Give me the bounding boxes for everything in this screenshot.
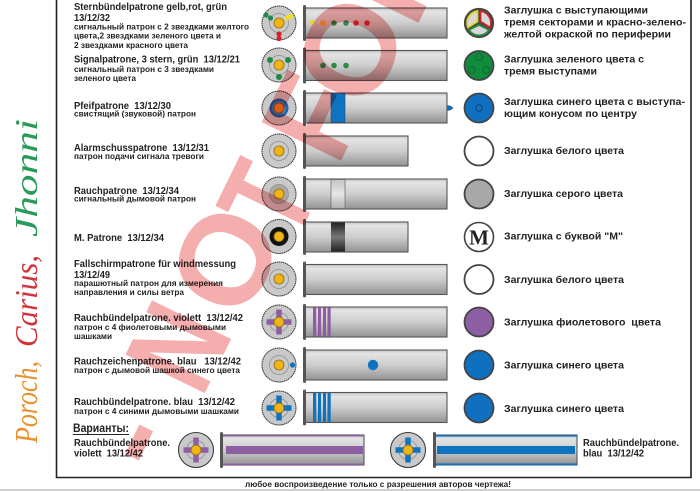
variant blue label — [583, 437, 679, 460]
row 6 end view — [262, 220, 296, 254]
row 4: Alarmschusspatrone — [74, 133, 624, 169]
row 3 plug: blue with cone — [464, 94, 494, 122]
row 3 plug description: ющим конусом по центру — [504, 108, 637, 120]
row 9 description — [74, 356, 241, 375]
row 8 description: Rauchbündelpatrone. violett 13/12/42 — [74, 312, 243, 324]
watermark: - — [56, 387, 204, 488]
row 7: Fallschirmpatrone — [74, 258, 624, 298]
variant: violet — [74, 432, 364, 468]
row 2 description: сигнальный патрон с 3 звездками — [74, 64, 214, 74]
row 1: Sternbündelpatrone — [74, 1, 686, 50]
row 8 cartridge — [303, 304, 447, 340]
signature: Jhonni: Jhonni — [8, 119, 44, 237]
row 5 plug: grey — [464, 180, 494, 208]
row 3: Pfeifpatrone — [74, 90, 685, 126]
row 1 description — [74, 1, 249, 50]
row 1 cartridge — [303, 5, 447, 41]
watermark: T — [190, 142, 344, 257]
row 7 end view — [262, 262, 296, 296]
row 2 plug: green — [464, 51, 494, 80]
row 1 plug description: желтой окраской по периферии — [503, 28, 671, 40]
row 1 description: цвета,2 звездками зеленого цвета и — [74, 30, 221, 40]
row 5 description: Rauchpatrone 13/12/34 — [74, 185, 179, 197]
row 7 description: 13/12/49 — [74, 269, 110, 281]
row 3 cartridge — [303, 90, 453, 126]
row 7 plug description: Заглушка белого цвета — [504, 274, 624, 286]
row 6 description: M. Patrone 13/12/34 — [74, 232, 164, 244]
row 7 description: парашютный патрон для измерения — [74, 278, 223, 288]
row 1 plug: three sectors — [464, 8, 494, 38]
row 1 plug description: тремя секторами и красно-зелено- — [504, 16, 686, 28]
row 2 description: зеленого цвета — [74, 73, 136, 83]
variant violet label: Rauchbündelpatrone. — [74, 437, 170, 449]
row 10 description — [74, 396, 239, 416]
row 8 description — [74, 312, 243, 341]
row 4 cartridge — [303, 133, 408, 169]
row 2 end view — [262, 48, 296, 82]
authors signature — [8, 119, 44, 444]
row 8 plug: violet — [464, 308, 494, 336]
row 2: Signalpatrone — [74, 48, 644, 84]
row 6 cartridge — [303, 219, 408, 255]
row 6 plug: letter M: M — [469, 226, 489, 250]
row 9 cartridge — [303, 347, 447, 383]
row 5 cartridge — [303, 176, 447, 212]
row 9: Rauchzeichenpatrone — [74, 347, 624, 383]
row 3 description — [74, 100, 196, 118]
row 6: M. Patrone — [74, 219, 623, 255]
row 9 description: патрон с дымовой шашкой синего цвета — [74, 365, 240, 375]
variant blue end view — [390, 432, 426, 468]
row 4 plug: white — [464, 136, 494, 166]
signature: Poroch: Poroch, — [8, 361, 44, 444]
row 3 description: свистящий (звуковой) патрон — [74, 108, 196, 118]
watermark: F — [234, 54, 393, 180]
row 10 plug description: Заглушка синего цвета — [504, 403, 624, 415]
row 7 description: направления и силы ветра — [74, 287, 184, 297]
row 5 plug description: Заглушка серого цвета — [504, 188, 623, 200]
variant: blue — [390, 432, 679, 468]
row 10 end view — [262, 391, 296, 425]
row 1 plug description: Заглушка с выступающими — [504, 4, 648, 16]
variant violet label: violett 13/12/42 — [74, 448, 143, 460]
row 1 plug description — [503, 4, 686, 40]
variant violet end view — [178, 432, 214, 468]
row 1 end view — [262, 6, 296, 41]
row 5 end view — [262, 177, 296, 211]
variant blue label: Rauchbündelpatrone. — [583, 437, 679, 449]
row 2 plug description — [504, 54, 644, 78]
row 3 plug description — [504, 96, 685, 120]
variant violet label — [74, 437, 170, 460]
variant blue cartridge — [433, 432, 577, 468]
row 8: Rauchbündelpatrone violett — [74, 304, 661, 341]
row 10 plug: blue — [464, 394, 494, 422]
row 7 plug: white — [464, 265, 494, 294]
watermark: N — [98, 282, 259, 411]
row 9 description: Rauchzeichenpatrone. blau 13/12/42 — [74, 356, 241, 368]
signature: Carius: Carius, — [8, 255, 44, 347]
row 9 end view — [262, 348, 296, 382]
row 3 description: Pfeifpatrone 13/12/30 — [74, 100, 171, 112]
row 7 description: Fallschirmpatrone für windmessung — [74, 258, 236, 270]
row 2 description — [74, 54, 240, 83]
row 3 plug description: Заглушка синего цвета с выступа- — [504, 96, 685, 108]
row 2 description: Signalpatrone, 3 stern, grün 13/12/21 — [74, 54, 240, 66]
row 8 end view — [262, 305, 296, 339]
row 1 description: 13/12/32 — [74, 12, 110, 24]
row 4 plug description: Заглушка белого цвета — [504, 145, 624, 157]
row 10 description: Rauchbündelpatrone. blau 13/12/42 — [74, 396, 235, 408]
watermark — [56, 0, 480, 488]
watermark: O — [140, 184, 312, 336]
row 1 description: сигнальный патрон с 2 звездками желтого — [74, 22, 249, 32]
row 6 plug description: Заглушка с буквой "М" — [504, 230, 623, 242]
variant violet cartridge — [220, 432, 364, 468]
row 2 plug description: Заглушка зеленого цвета с — [504, 54, 644, 66]
bottom strip — [0, 489, 700, 491]
row 3 end view — [262, 91, 296, 125]
row 10: Rauchbündelpatrone blau — [74, 390, 624, 426]
row 1 description: Sternbündelpatrone gelb,rot, grün — [74, 1, 227, 13]
row 4 description: Alarmschusspatrone 13/12/31 — [74, 142, 209, 154]
row 4 description — [74, 142, 209, 161]
row 8 plug description: Заглушка фиолетового цвета — [504, 316, 661, 328]
row 8 description: патрон с 4 фиолетовыми дымовыми — [74, 322, 226, 332]
row 8 description: шашками — [74, 331, 112, 341]
footer copyright note: любое воспроизведение только с разрешения авторов чертежа! — [245, 479, 511, 489]
row 5 description: сигнальный дымовой патрон — [74, 194, 196, 204]
row 5 description — [74, 185, 196, 204]
row 4 end view — [262, 134, 296, 168]
row 2 cartridge — [303, 48, 447, 84]
row 4 description: патрон подачи сигнала тревоги — [74, 151, 204, 161]
row 9 plug description: Заглушка синего цвета — [504, 360, 624, 372]
row 5: Rauchpatrone — [74, 176, 623, 212]
row 9 plug: blue — [464, 350, 494, 380]
variants heading: Варианты: — [73, 421, 129, 435]
row 10 cartridge — [303, 390, 447, 426]
row 10 description: патрон с 4 синими дымовыми шашками — [74, 406, 239, 416]
variant blue label: blau 13/12/42 — [583, 448, 644, 460]
row 7 description — [74, 258, 236, 297]
row 6 plug: letter M — [464, 222, 494, 252]
row 2 plug description: тремя выступами — [504, 66, 597, 78]
row 7 cartridge — [303, 262, 447, 298]
row 1 description: 2 звездками красного цвета — [74, 40, 188, 50]
